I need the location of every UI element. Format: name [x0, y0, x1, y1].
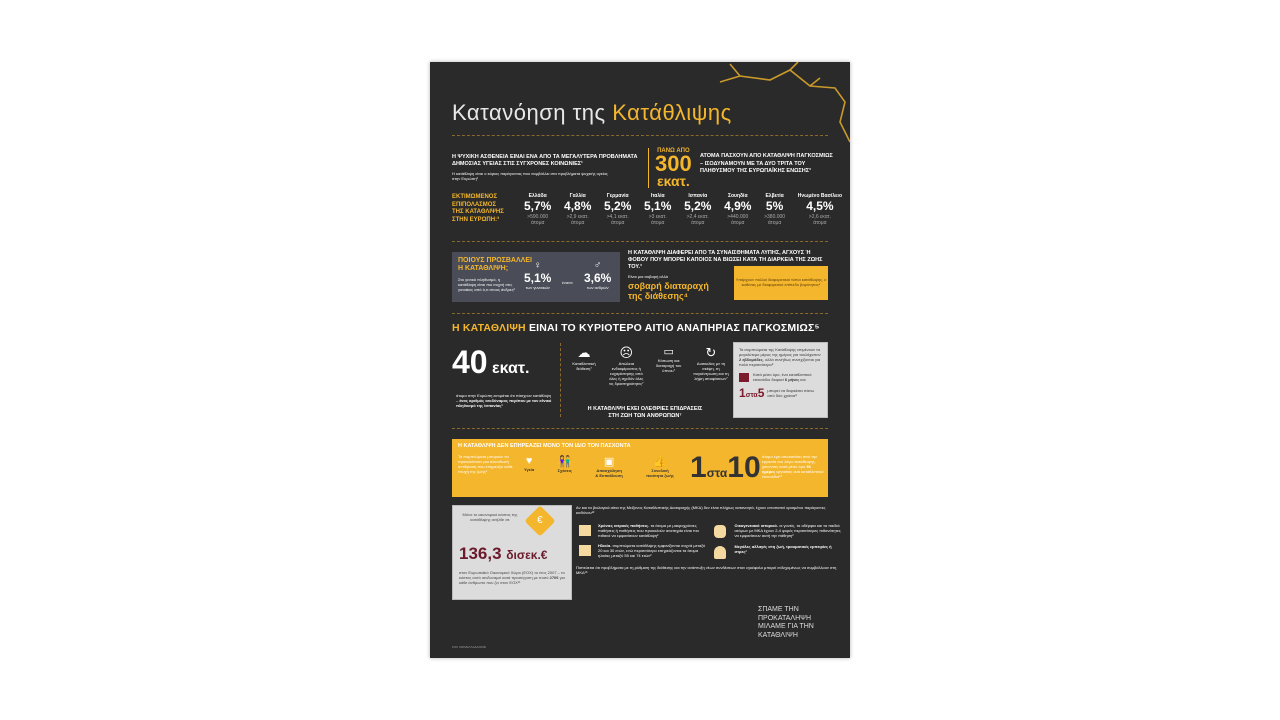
panel: affects others (gold band): ♥: [526, 455, 532, 467]
panel: cost: στον Ευρωπαϊκό Οικονομικό Χώρο (ΕΟΧ) το έτος 2007 – το κόστος αυτό ισοδυναμεί κατά προσέγγιση με ποσό 270€ για κάθε άνθρωπο που ζει στον ΕΟΧ¹¹: [459, 570, 565, 585]
icons: symptoms: ☹: [620, 345, 633, 360]
panel: who is affected: ♀: [534, 260, 541, 271]
panel: affects others (gold band): Συνολική: [651, 468, 669, 473]
intro text: Η κατάθλιψη είναι ο κύριος παράγοντας που συμβάλλει στα προβλήματα ψυχικής υγείας στην Ευρώπη²: [452, 171, 608, 181]
prevalence table: άτομα: [813, 220, 827, 226]
panel: affects others (gold band): Σχέσεις: [558, 468, 572, 473]
prevalence table: >590.000: [527, 214, 548, 220]
icons: symptoms: Δυσκολίες με τη σκέψη, τη συγκέντρωση και τη λήψη αποφάσεων⁷: [693, 361, 729, 381]
prevalence table: Γαλλία: [570, 193, 586, 199]
prevalence table: [524, 193, 842, 226]
prevalence label: [452, 194, 504, 222]
footer code: ΣΟΚ 0000/ΕΛΛΑΔΑ/0000: [452, 645, 486, 649]
stat: 40 million: 40 εκατ.: [452, 344, 529, 380]
panel: who is affected: 5,1%: [524, 271, 551, 285]
icons: symptoms: ▭: [663, 346, 674, 358]
text: different from sadness: της διάθεσης⁴: [628, 291, 688, 301]
logo: ΜΙΛΑΜΕ ΓΙΑ ΤΗΝ: [758, 623, 814, 630]
panel: who is affected: Στο γενικό πληθυσμό, η κατάθλιψη είναι πιο συχνή στις γυναίκες από ό,τι στους άνδρες²: [458, 277, 515, 292]
panel: who is affected: έναντι: [562, 280, 573, 285]
icon: euro tag: €: [537, 515, 543, 526]
prevalence table: Σουηδία: [728, 193, 748, 199]
poster: [430, 62, 850, 658]
prevalence table: Ελλάδα: [529, 193, 547, 199]
panel: affects others (gold band): Τα συμπτώματα μπορούν να προκαλέσουν μια αλυσιδωτή αντίδραση που επηρεάζει κάθε πτυχή της ζωής⁹: [458, 454, 513, 474]
prevalence table: >4,1 εκατ.: [607, 214, 629, 220]
prevalence table: >3 εκατ.: [649, 214, 667, 220]
prevalence label: ΤΗΣ ΚΑΤΑΘΛΙΨΗΣ: [452, 209, 504, 215]
icons: symptoms: Κόπωση και διαταραχή του ύπνου⁷: [656, 358, 681, 373]
panel: affects others (gold band): ποιότητα ζωής: [646, 473, 674, 478]
text: severe effects: ΣΤΗ ΖΩΗ ΤΩΝ ΑΝΘΡΩΠΩΝ⁷: [608, 413, 682, 419]
text: risk factors: Οικογενειακό ιστορικό- οι γονείς, τα αδέρφια και τα παιδιά ατόμων με ΜΚΔ έχουν 2-4 φορές περισσότερες πιθανότητες να εμφανίσουν αυτή την πάθηση²: [734, 523, 841, 538]
text: risk factors: Πιστεύεται ότι προβλήματα με τη ρύθμιση της διάθεσης και την ανάπτυξη νέων συνδέσεων στον εγκέφαλο μπορεί ενδεχομένως να συμβάλλουν στη ΜΚΔ¹³: [576, 565, 836, 575]
panel: affects others (gold band): Υγεία: [524, 467, 534, 472]
text: severe effects: [588, 406, 702, 419]
panel: affects others (gold band): ▣: [604, 456, 614, 468]
prevalence table: 4,9%: [724, 199, 751, 213]
icons: symptoms: Καταθλιπτική διάθεση⁷: [572, 361, 596, 371]
panel: affects others (gold band): [452, 439, 828, 497]
panel: cost: Μόνο το οικονομικό κόστος της κατάθλιψης ανήλθε σε: [463, 512, 517, 522]
panel: who is affected: [452, 252, 620, 302]
text: risk factors: Αν και τα βιολογικά αίτια της Μείζονος Καταθλιπτικής Διαταραχής (ΜΚΔ) δεν είναι πλήρως κατανοητά, έχουν εντοπιστεί ορισμένοι παράγοντες κινδύνου¹²: [576, 505, 825, 515]
panel: affects others (gold band): Απασχόληση: [596, 468, 622, 473]
prevalence table: >2,9 εκατ.: [567, 214, 589, 220]
text: risk factors: Μεγάλες αλλαγές στη ζωή, τραυματικές εμπειρίες ή στρες²: [734, 544, 832, 554]
panel: who is affected: των γυναικών: [526, 285, 550, 290]
prevalence table: 5%: [766, 199, 783, 213]
text: different from sadness: Η ΚΑΤΑΘΛΙΨΗ ΔΙΑΦΕΡΕΙ ΑΠΟ ΤΑ ΣΥΝΑΙΣΘΗΜΑΤΑ ΛΥΠΗΣ, ΑΓΧΟΥΣ Ή ΦΟΒΟΥ ΠΟΥ ΜΠΟΡΕΙ ΚΑΠΟΙΟΣ ΝΑ ΒΙΩΣΕΙ ΚΑΤΑ ΤΗ ΔΙΑΡΚΕΙΑ ΤΗΣ ΖΩΗΣ ΤΟΥ.³: [628, 250, 822, 270]
panel: duration: Τα συμπτώματα της Κατάθλιψης επιμένουν τα μεγαλύτερο μέρος της ημέρας για τουλάχιστον 2 εβδομάδες, αλλά συνήθως συνεχίζονται για πολύ περισσότερο⁸: [739, 347, 821, 367]
logo: ΠΡΟΚΑΤΑΛΗΨΗ: [758, 614, 811, 622]
prevalence table: >440.000: [727, 214, 748, 220]
panel: duration: [733, 342, 828, 418]
prevalence table: άτομα: [531, 220, 544, 226]
panel: affects others (gold band): 👫: [558, 456, 572, 468]
prevalence table: άτομα: [731, 220, 744, 226]
stat: 300 million: 300: [655, 151, 692, 176]
callout: gold box: [734, 266, 828, 300]
gold crack decoration: [720, 62, 850, 142]
prevalence table: Γερμανία: [607, 193, 629, 199]
icons: symptoms: ☁: [578, 345, 590, 360]
panel: duration: 1στα5: [739, 386, 764, 400]
intro text: [452, 154, 638, 181]
prevalence label: ΣΤΗΝ ΕΥΡΩΠΗ:³: [452, 216, 499, 222]
prevalence table: Ελβετία: [765, 193, 784, 199]
prevalence table: άτομα: [691, 220, 704, 226]
prevalence table: άτομα: [651, 220, 664, 226]
panel: affects others (gold band): άτομα έχει απουσιάσει από την εργασία του λόγω κατάθλιψης, χάνοντας κατά μέσο όρο 36 ημέρες εργασίας ανά καταθλιπτικό επεισόδιο¹⁰: [762, 454, 824, 479]
icon: euro tag: [524, 505, 556, 537]
prevalence table: άτομα: [571, 220, 584, 226]
panel: affects others (gold band): 1στα10: [690, 451, 761, 484]
panel: affects others (gold band): & Εκπαίδευση: [595, 473, 623, 478]
panel: cost: 136,3 δισεκ.€: [459, 544, 547, 563]
prevalence table: 4,5%: [806, 199, 834, 213]
panel: who is affected: ♂: [594, 260, 601, 271]
prevalence table: 5,2%: [684, 199, 711, 213]
prevalence table: Ηνωμένο Βασίλειο: [798, 193, 842, 199]
prevalence table: >2,4 εκατ.: [687, 214, 709, 220]
stat: 300 million: ΠΑΝΩ ΑΠΟ: [657, 148, 690, 154]
panel: who is affected: των ανδρών: [587, 285, 609, 290]
text: severe effects: Η ΚΑΤΑΘΛΙΨΗ ΕΧΕΙ ΟΛΕΘΡΙΕΣ ΕΠΙΔΡΑΣΕΙΣ: [588, 406, 702, 412]
prevalence table: 5,2%: [604, 199, 631, 213]
text: risk factors: [576, 505, 841, 575]
panel: duration: Κατά μέσο όρο, ένα καταθλιπτικό επεισόδιο διαρκεί 6 μήνες και: [753, 372, 811, 382]
text: people suffering: ΑΤΟΜΑ ΠΑΣΧΟΥΝ ΑΠΟ ΚΑΤΑΘΛΙΨΗ ΠΑΓΚΟΣΜΙΩΣ – ΙΣΟΔΥΝΑΜΟΥΝ ΜΕ ΤΑ ΔΥΟ ΤΡΙΤΑ ΤΟΥ ΠΛΗΘΥΣΜΟΥ ΤΗΣ ΕΥΡΩΠΑΪΚΗΣ ΕΝΩΣΗΣ³: [700, 153, 833, 174]
text: different from sadness: [628, 250, 822, 301]
panel: affects others (gold band): Η ΚΑΤΑΘΛΙΨΗ ΔΕΝ ΕΠΗΡΕΑΖΕΙ ΜΟΝΟ ΤΟΝ ΙΔΙΟ ΤΟΝ ΠΑΣΧΟΝΤΑ: [458, 443, 631, 449]
text: risk factors: Ηλικία- συμπτώματα κατάθλιψης εμφανίζονται συχνά μεταξύ 20 και 30 ετών, ενώ περισσότερο επηρεάζονται τα άτομα ηλικίας μεταξύ 55 και 74 ετών²: [598, 543, 705, 558]
text: different from sadness: Είναι μια σοβαρή αλλά: [628, 274, 668, 279]
prevalence table: 4,8%: [564, 199, 591, 213]
icons: symptoms: [572, 345, 729, 386]
text: different from sadness: σοβαρή διαταραχή: [628, 281, 709, 291]
icons: symptoms: ↻: [706, 345, 716, 360]
stat: 40 million: [452, 344, 552, 408]
prevalence table: >2,6 εκατ.: [809, 214, 831, 220]
callout: gold box: Υπάρχουν πολλοί διαφορετικοί τύποι κατάθλιψης, ο καθένας με διαφορετικό επίπεδο βαρύτητας⁴: [736, 277, 826, 287]
icons: symptoms: Απώλεια ενδιαφέροντος ή ευχαρίστησης από όλες ή σχεδόν όλες τις δραστηριότητες⁷: [609, 361, 644, 386]
panel: duration: μπορεί να διαρκέσει πάνω από δύο χρόνια⁸: [767, 388, 814, 398]
heading: leading cause of disability: Η ΚΑΤΑΘΛΙΨΗ ΕΙΝΑΙ ΤΟ ΚΥΡΙΟΤΕΡΟ ΑΙΤΙΟ ΑΝΑΠΗΡΙΑΣ ΠΑΓΚΟΣΜΙΩΣ⁵: [452, 322, 820, 334]
prevalence table: >380.000: [764, 214, 785, 220]
prevalence label: ΕΚΤΙΜΩΜΕΝΟΣ: [452, 194, 497, 200]
stat: 300 million: εκατ.: [657, 173, 690, 189]
stat: 40 million: άτομα στην Ευρώπη εκτιμάται ότι πάσχουν κατάθλιψη – ένας αριθμός ισοδύναμος περίπου με τον εθνικό πληθυσμό της Ισπανίας⁶: [456, 393, 551, 408]
intro text: Η ΨΥΧΙΚΗ ΑΣΘΕΝΕΙΑ ΕΙΝΑΙ ΕΝΑ ΑΠΟ ΤΑ ΜΕΓΑΛΥΤΕΡΑ ΠΡΟΒΛΗΜΑΤΑ ΔΗΜΟΣΙΑΣ ΥΓΕΙΑΣ ΣΤΙΣ ΣΥΓΧΡΟΝΕΣ ΚΟΙΝΩΝΙΕΣ¹: [452, 154, 637, 167]
text: risk factors: Χρόνιες ιατρικές παθήσεις- τα άτομα με μακροχρόνιες παθήσεις ή παθήσεις που προκαλούν αναπηρία είναι πιο πιθανό να εμφανίσουν κατάθλιψη²: [598, 523, 699, 538]
prevalence table: Ισπανία: [688, 193, 707, 199]
prevalence table: 5,7%: [524, 199, 551, 213]
panel: who is affected: Η ΚΑΤΑΘΛΙΨΗ;: [458, 265, 508, 272]
prevalence table: άτομα: [611, 220, 624, 226]
title: Κατανόηση της Κατάθλιψης: [452, 100, 732, 125]
prevalence table: Ιταλία: [651, 193, 665, 199]
prevalence table: άτομα: [768, 220, 781, 226]
logo: ΣΠΑΜΕ ΤΗΝ: [758, 606, 799, 613]
logo: [758, 606, 814, 638]
panel: affects others (gold band): 👍: [653, 456, 667, 468]
panel: cost: [452, 505, 572, 600]
stat: 300 million: [648, 148, 692, 188]
panel: who is affected: ΠΟΙΟΥΣ ΠΡΟΣΒΑΛΛΕΙ: [458, 257, 532, 264]
prevalence table: 5,1%: [644, 199, 671, 213]
panel: who is affected: 3,6%: [584, 271, 611, 285]
logo: ΚΑΤΑΘΛΙΨΗ: [758, 632, 798, 638]
prevalence label: ΕΠΙΠΟΛΑΣΜΟΣ: [452, 202, 496, 208]
